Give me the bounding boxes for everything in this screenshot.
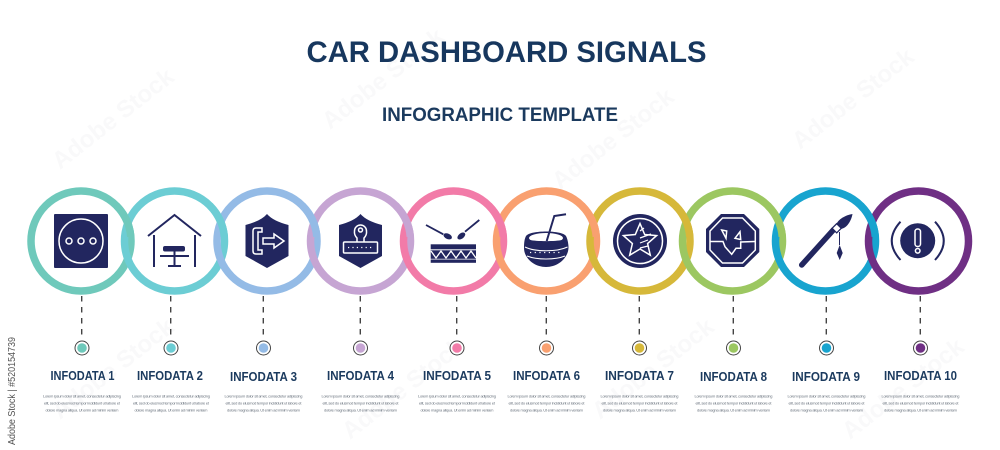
text block: infodata 7: dolore magna aliqua. Ut enim ad minim veniam [603, 408, 677, 412]
text block: infodata 6: dolore magna aliqua. Ut enim ad minim veniam [510, 408, 584, 412]
text block: infodata 10: INFODATA 10 [884, 368, 957, 383]
text block: infodata 3 [224, 369, 302, 412]
watermark pattern: Adobe Stock [337, 333, 470, 445]
text block: infodata 2: INFODATA 2 [137, 368, 203, 383]
text block: infodata 8 [694, 369, 772, 412]
text block: infodata 9: INFODATA 9 [792, 369, 860, 384]
text block: infodata 8: INFODATA 8 [700, 369, 767, 384]
text block: infodata 9: Lorem ipsum dolor sit amet, consectetur adipiscing [788, 394, 866, 398]
text block: infodata 10: elit, sed do eiusmod tempor incididunt ut labore et [882, 400, 959, 406]
text block: infodata 6: Lorem ipsum dolor sit amet, consectetur adipiscing [508, 394, 586, 398]
text block: infodata 2: dolore magna aliqua. Ut enim ad minim veniam [134, 408, 208, 412]
watermark pattern: Adobe Stock [47, 313, 180, 425]
text block: infodata 1: dolore magna aliqua. Ut enim ad minim veniam [46, 408, 119, 412]
icon: garage with table [148, 215, 201, 267]
text block: infodata 4 [322, 368, 400, 412]
text block: infodata 8: elit, sed do eiusmod tempor incididunt ut labore et [696, 400, 772, 406]
watermark pattern: Adobe Stock [787, 43, 920, 155]
text block: infodata 10 [882, 368, 960, 412]
icon: shield with exit arrow [246, 214, 288, 268]
watermark pattern: Adobe Stock [837, 333, 970, 445]
connector dashes [82, 296, 920, 339]
text block: infodata 4: dolore magna aliqua. Ut enim ad minim veniam [324, 408, 398, 412]
text block: infodata 1: Lorem ipsum dolor sit amet, consectetur adipiscing [43, 394, 121, 398]
text block: infodata 2 [132, 368, 210, 412]
text block: infodata 10: dolore magna aliqua. Ut enim ad minim veniam [884, 408, 958, 412]
icon: shield with stamp [339, 214, 382, 268]
watermark pattern: Adobe Stock [317, 23, 450, 135]
text block: infodata 3: INFODATA 3 [230, 369, 297, 384]
text block: infodata 7: INFODATA 7 [605, 368, 674, 383]
text block: infodata 1: elit, sed do eiusmod tempor incididunt ut labore et [44, 400, 121, 406]
text block: infodata 8: dolore magna aliqua. Ut enim ad minim veniam [697, 408, 771, 412]
text block: infodata 7 [600, 368, 678, 412]
icon: coconut drink [524, 214, 568, 267]
text block: infodata 2: elit, sed do eiusmod tempor incididunt ut labore et [133, 400, 210, 406]
icon: socket [54, 214, 108, 268]
watermark pattern: Adobe Stock [547, 83, 680, 195]
text block: infodata 5: dolore magna aliqua. Ut enim ad minim veniam [420, 408, 494, 412]
text block: infodata 4: INFODATA 4 [327, 368, 395, 383]
subtitle: INFOGRAPHIC TEMPLATE [382, 105, 618, 126]
marker dots [75, 341, 928, 355]
text block: infodata 6: INFODATA 6 [513, 368, 580, 383]
title: CAR DASHBOARD SIGNALS [306, 36, 706, 69]
text block: infodata 9: elit, sed do eiusmod tempor incididunt ut labore et [788, 400, 865, 406]
icon: star badge [613, 214, 667, 268]
icon: brake warning [892, 222, 944, 260]
text block: infodata 9 [788, 369, 866, 412]
text block: infodata 5: INFODATA 5 [423, 368, 491, 383]
text block: infodata 6 [508, 368, 586, 412]
text block: infodata 5: Lorem ipsum dolor sit amet, consectetur adipiscing [418, 394, 496, 398]
text block: infodata 5 [418, 368, 496, 412]
text block: infodata 9: dolore magna aliqua. Ut enim ad minim veniam [790, 408, 864, 412]
text block: infodata 2: Lorem ipsum dolor sit amet, consectetur adipiscing [132, 394, 210, 398]
icon: brush [802, 214, 852, 265]
text block: infodata 6: elit, sed do eiusmod tempor incididunt ut labore et [508, 400, 585, 406]
text block: infodata 7: elit, sed do eiusmod tempor incididunt ut labore et [602, 400, 678, 406]
text block: infodata 3: elit, sed do eiusmod tempor incididunt ut labore et [226, 400, 302, 406]
text block: infodata 3: dolore magna aliqua. Ut enim ad minim veniam [227, 408, 301, 412]
text block: infodata 4: elit, sed do eiusmod tempor incididunt ut labore et [322, 400, 399, 406]
text block: infodata 1 [43, 368, 121, 412]
icon: drum [426, 220, 479, 263]
text block: infodata 4: Lorem ipsum dolor sit amet, consectetur adipiscing [322, 394, 400, 398]
watermark pattern: Adobe Stock [47, 63, 180, 175]
watermark pattern: Adobe Stock [587, 313, 720, 425]
icon: cracked octagon [706, 214, 759, 267]
interlocking rings [31, 191, 968, 291]
text block: infodata 3: Lorem ipsum dolor sit amet, consectetur adipiscing [224, 394, 302, 398]
side credit: Adobe Stock | #520154739 [6, 337, 18, 445]
text block: infodata 5: elit, sed do eiusmod tempor incididunt ut labore et [419, 400, 496, 406]
text block: infodata 7: Lorem ipsum dolor sit amet, consectetur adipiscing [600, 394, 678, 398]
text block: infodata 1: INFODATA 1 [50, 368, 114, 383]
text block: infodata 8: Lorem ipsum dolor sit amet, consectetur adipiscing [694, 394, 772, 398]
text block: infodata 10: Lorem ipsum dolor sit amet, consectetur adipiscing [882, 394, 960, 398]
